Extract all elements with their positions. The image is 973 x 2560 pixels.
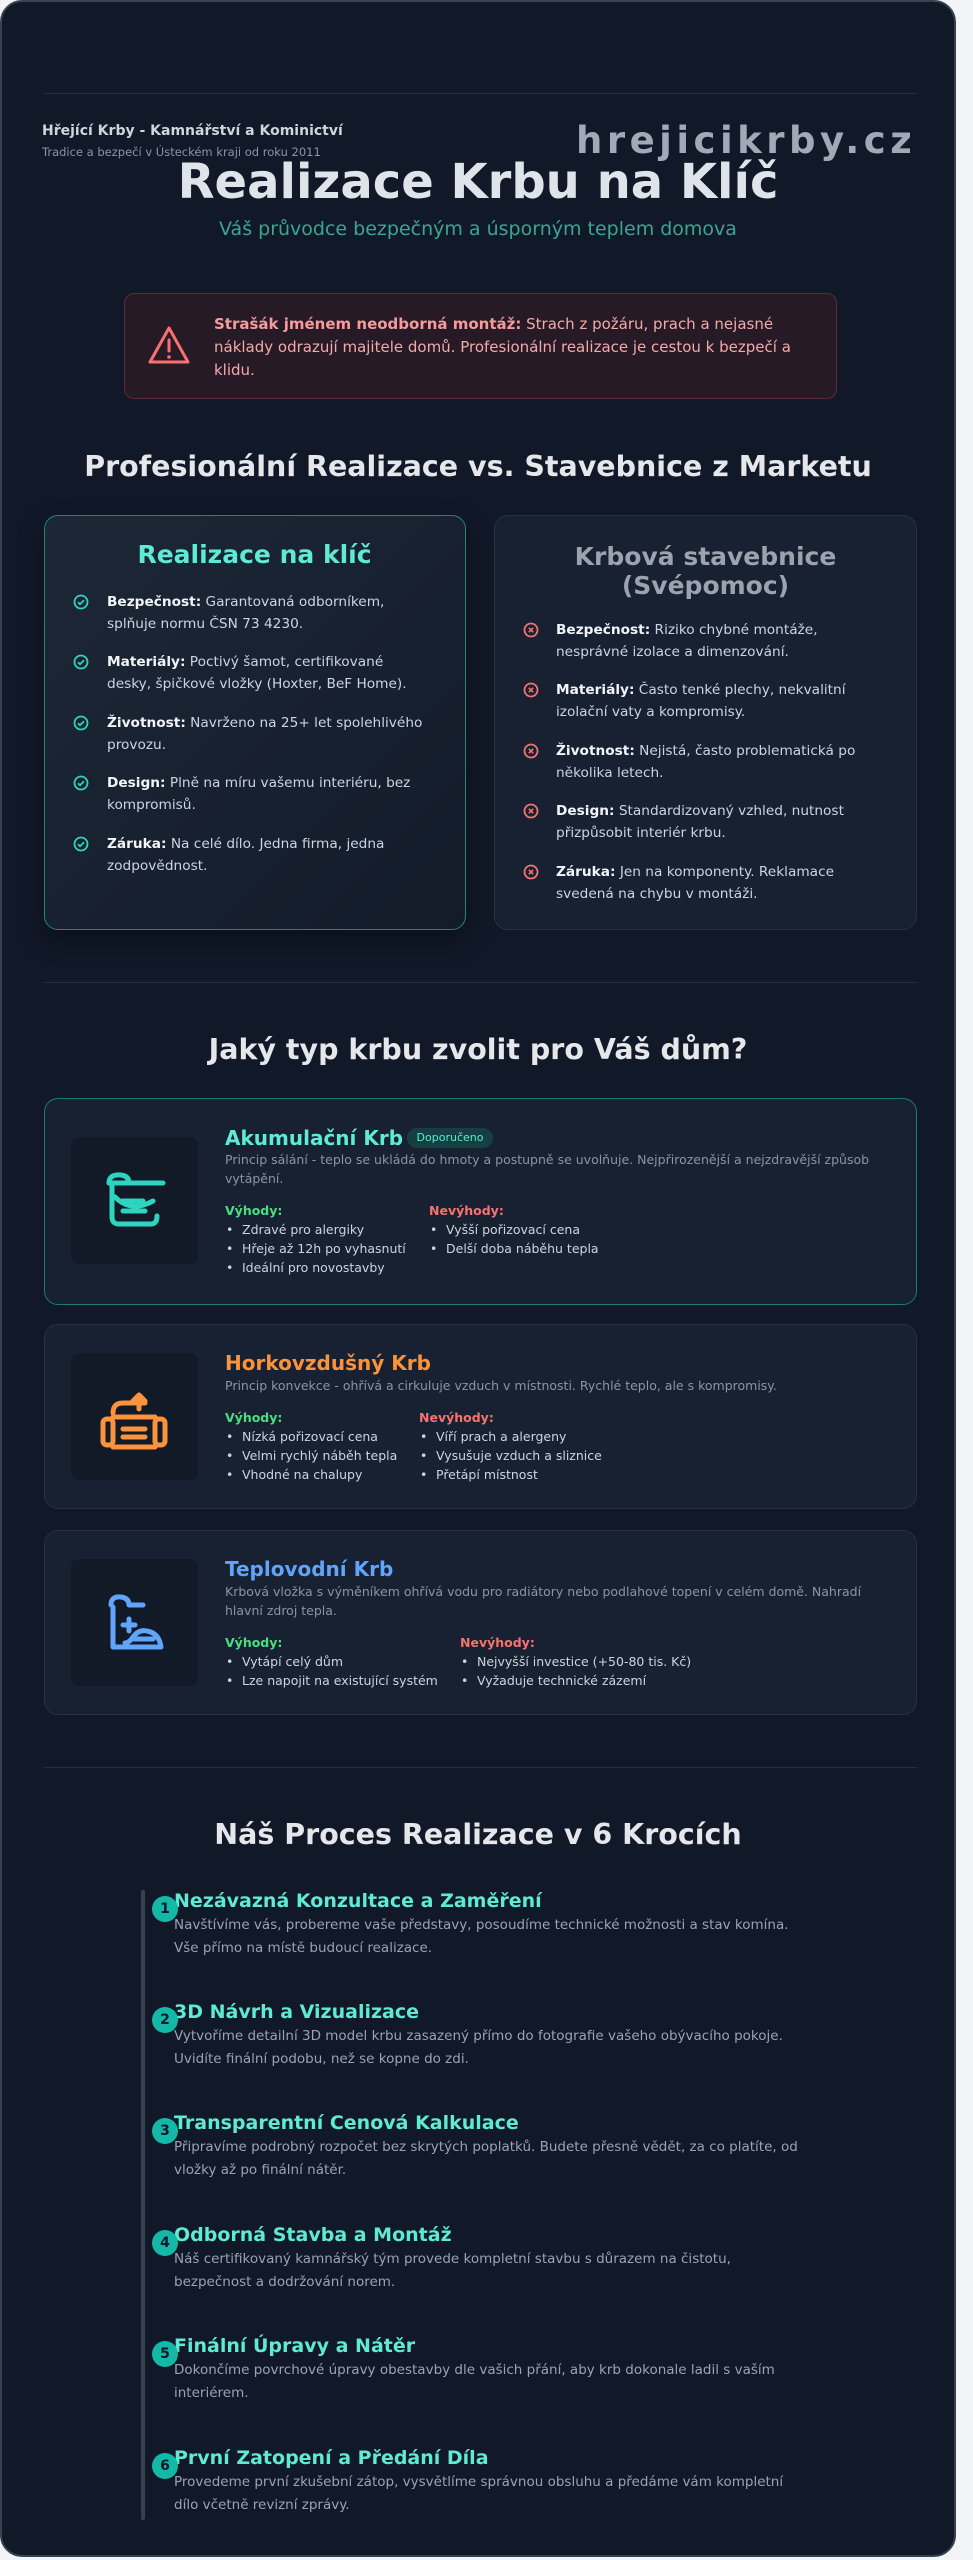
panel: horkovzdušný krb: [44, 1324, 917, 1509]
website url: hrejicikrby.cz: [576, 119, 916, 162]
item: záruka: [524, 864, 834, 902]
cons: Nevýhody:: [460, 1635, 535, 1650]
item: životnost: [524, 742, 855, 781]
description: Princip konvekce - ohřívá a cirkuluje vzduch v místnosti. Rychlé teplo, ale s kompromisy.: [225, 1378, 777, 1393]
pros: Výhody:: [225, 1203, 282, 1218]
title: Teplovodní Krb: [225, 1557, 393, 1581]
item: záruka: Záruka: Jen na komponenty. Reklamace: [556, 864, 834, 880]
step 6: Provedeme první zkušební zátop, vysvětlíme správnou obsluhu a předáme vám kompletní: [174, 2474, 783, 2490]
icon: teplovodní: [71, 1559, 198, 1686]
cons: Delší doba náběhu tepla: [446, 1241, 599, 1256]
item: materiály: [524, 682, 846, 720]
brand name: Hřející Krby - Kamnářství a Kominictví: [42, 123, 343, 139]
item: bezpečnost: [524, 622, 818, 660]
pros: Výhody:: [225, 1635, 282, 1650]
step 1: Nezávazná Konzultace a Zaměření: [174, 1890, 542, 1912]
item: záruka: Záruka: Na celé dílo. Jedna firma, jedna: [107, 836, 384, 852]
description: Krbová vložka s výměníkem ohřívá vodu pro radiátory nebo podlahové topení v celém domě. Nahradí hlavní zdroj tepla.: [225, 1584, 861, 1618]
step 4: 4: [160, 2235, 170, 2251]
subtitle: Váš průvodce bezpečným a úsporným teplem domova: [219, 218, 737, 240]
step 3: vložky až po finální nátěr.: [174, 2162, 346, 2178]
item: životnost: provozu.: [107, 737, 166, 753]
panel title: [575, 542, 836, 600]
callout: warning: [124, 293, 837, 399]
step 3: [152, 2112, 798, 2178]
item: životnost: Životnost: Navrženo na 25+ let spolehlivého: [107, 715, 422, 731]
step 5: interiérem.: [174, 2385, 249, 2401]
item: materiály: Materiály: Poctivý šamot, certifikované: [107, 654, 383, 670]
panel: realizace na klíč: [44, 515, 466, 930]
step 6: [152, 2447, 784, 2513]
step 2: 2: [160, 2012, 170, 2028]
step 3: 3: [160, 2123, 170, 2139]
cons: Vyšší pořizovací cena: [446, 1222, 580, 1237]
step 5: Finální Úpravy a Nátěr: [174, 2335, 415, 2357]
heading: comparison: Profesionální Realizace vs. Stavebnice z Marketu: [84, 450, 872, 483]
step 3: Připravíme podrobný rozpočet bez skrytých poplatků. Budete přesně vědět, za co platíte, od: [174, 2139, 798, 2155]
panel title: (Svépomoc): [622, 571, 789, 600]
pros: Velmi rychlý náběh tepla: [242, 1448, 397, 1463]
cons: Vyžaduje technické zázemí: [477, 1673, 646, 1688]
pros: Lze napojit na existující systém: [242, 1673, 438, 1688]
item: životnost: několika letech.: [556, 765, 664, 781]
step 1: Vše přímo na místě budoucí realizace.: [174, 1940, 432, 1956]
step 5: Dokončíme povrchové úpravy obestavby dle vašich přání, aby krb dokonale ladil s vaším: [174, 2362, 775, 2378]
pros: Nízká pořizovací cena: [242, 1429, 378, 1444]
item: materiály: Materiály: Často tenké plechy, nekvalitní: [556, 682, 846, 698]
heading: types: Jaký typ krbu zvolit pro Váš dům?: [209, 1033, 747, 1066]
step 6: První Zatopení a Předání Díla: [174, 2447, 489, 2469]
cons: [429, 1203, 599, 1256]
warning text: Strašák jménem neodborná montáž: Strach z požáru, prach a nejasné náklady odrazují majitele domů. Profesionální realizace je cestou k bezpečí a klidu.: [214, 315, 791, 379]
item: design: Design: Plně na míru vašemu interiéru, bez: [107, 775, 410, 791]
item: design: [524, 803, 844, 841]
pros: [225, 1203, 406, 1275]
pros: Výhody:: [225, 1410, 282, 1425]
step 2: Uvidíte finální podobu, než se kopne do zdi.: [174, 2051, 469, 2067]
step 4: [152, 2224, 731, 2290]
pros: Vytápí celý dům: [242, 1654, 343, 1669]
pros: Vhodné na chalupy: [242, 1467, 362, 1482]
step 1: [152, 1890, 789, 1956]
cons: [460, 1635, 691, 1688]
item: design: [74, 775, 410, 813]
item: životnost: [74, 714, 422, 753]
step 4: bezpečnost a dodržování norem.: [174, 2274, 395, 2290]
step 5: [152, 2334, 775, 2401]
panel title: Realizace na klíč: [137, 540, 372, 569]
pros: Ideální pro novostavby: [242, 1260, 385, 1275]
item: materiály: [74, 654, 407, 692]
step 3: Transparentní Cenová Kalkulace: [174, 2112, 519, 2134]
item: bezpečnost: splňuje normu ČSN 73 4230.: [107, 616, 303, 632]
heading: process: Náš Proces Realizace v 6 Krocích: [214, 1818, 742, 1851]
item: design: kompromisů.: [107, 797, 196, 813]
pros: Hřeje až 12h po vyhasnutí: [242, 1241, 406, 1256]
item: záruka: svedená na chybu v montáži.: [556, 886, 758, 902]
item: design: přizpůsobit interiér krbu.: [556, 825, 726, 841]
title: Akumulační Krb: [225, 1126, 403, 1150]
pros: [225, 1410, 397, 1482]
step 5: 5: [160, 2346, 170, 2362]
item: materiály: izolační vaty a kompromisy.: [556, 704, 745, 720]
step 4: Náš certifikovaný kamnářský tým provede kompletní stavbu s důrazem na čistotu,: [174, 2251, 731, 2267]
cons: Nevýhody:: [429, 1203, 504, 1218]
step 2: [152, 2001, 783, 2067]
title: Realizace Krbu na Klíč: [178, 154, 778, 210]
panel: stavebnice: [494, 515, 917, 930]
item: bezpečnost: Bezpečnost: Garantovaná odborníkem,: [107, 594, 384, 610]
step 2: Vytvoříme detailní 3D model krbu zasazený přímo do fotografie vašeho obývacího pokoje.: [174, 2028, 783, 2044]
title: Horkovzdušný Krb: [225, 1351, 431, 1375]
step 1: 1: [160, 1901, 170, 1917]
pros: Zdravé pro alergiky: [242, 1222, 364, 1237]
step 4: Odborná Stavba a Montáž: [174, 2224, 452, 2246]
cons: Nevýhody:: [419, 1410, 494, 1425]
step 2: 3D Návrh a Vizualizace: [174, 2001, 419, 2023]
icon: warning triangle: [148, 326, 190, 364]
pros: [225, 1635, 438, 1688]
item: záruka: zodpovědnost.: [107, 858, 207, 874]
cons: Vysušuje vzduch a sliznice: [436, 1448, 602, 1463]
step 1: Navštívíme vás, probereme vaše představy, posoudíme technické možnosti a stav komína.: [174, 1917, 789, 1933]
description: Princip sálání - teplo se ukládá do hmoty a postupně se uvolňuje. Nejpřirozenější a nejzdravější způsob vytápění.: [225, 1152, 869, 1186]
cons: Nejvyšší investice (+50-80 tis. Kč): [477, 1654, 691, 1669]
icon: horkovzdušný: [71, 1353, 198, 1480]
item: životnost: Životnost: Nejistá, často problematická po: [556, 743, 855, 759]
panel: akumulační krb: [44, 1098, 917, 1305]
item: záruka: [74, 836, 384, 874]
item: materiály: desky, špičkové vložky (Hoxter, BeF Home).: [107, 676, 407, 692]
item: bezpečnost: Bezpečnost: Riziko chybné montáže,: [556, 622, 818, 638]
badge: [407, 1128, 493, 1148]
timeline: [141, 1890, 798, 2520]
badge: Doporučeno: [417, 1131, 483, 1144]
brand tagline: Tradice a bezpečí v Ústeckém kraji od roku 2011: [42, 145, 321, 159]
step 6: 6: [160, 2458, 170, 2474]
icon: akumulační: [71, 1137, 198, 1264]
cons: Přetápí místnost: [436, 1467, 538, 1482]
cons: [419, 1410, 602, 1482]
item: design: Design: Standardizovaný vzhled, nutnost: [556, 803, 844, 819]
item: bezpečnost: [74, 594, 384, 632]
item: bezpečnost: nesprávné izolace a dimenzování.: [556, 644, 789, 660]
step 6: dílo včetně revizní zprávy.: [174, 2497, 350, 2513]
panel title: Krbová stavebnice: [575, 542, 836, 571]
panel: teplovodní krb: [44, 1530, 917, 1715]
cons: Víří prach a alergeny: [436, 1429, 566, 1444]
